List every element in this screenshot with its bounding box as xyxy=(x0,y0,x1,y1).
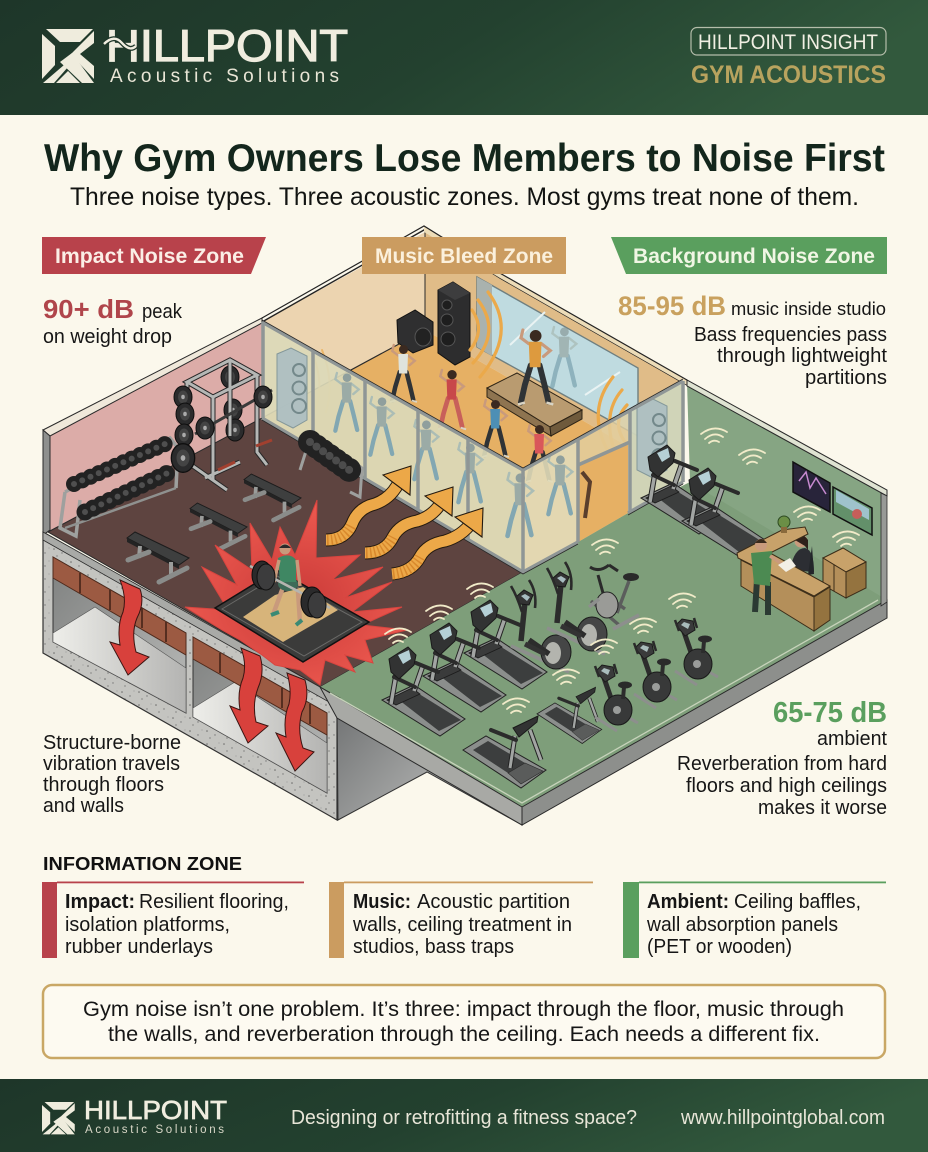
glass reflections xyxy=(277,348,667,536)
callout: structure-borne vibration: vibration travels xyxy=(43,753,180,775)
info card: ambient xyxy=(623,882,886,958)
callout: ambient stat: Reverberation from hard xyxy=(677,753,887,775)
header logo: HILLPOINT xyxy=(106,22,348,71)
vibration arrow 2 xyxy=(230,648,268,743)
callout: structure-borne vibration: through floors xyxy=(43,774,164,796)
info card: impact: rubber underlays xyxy=(65,936,213,958)
door figure xyxy=(582,472,590,518)
arrow 3 xyxy=(392,508,483,574)
gym floor: impact zone xyxy=(48,418,523,687)
arrow 2 xyxy=(365,487,453,553)
right wall end cap xyxy=(687,380,887,606)
weightlifter xyxy=(250,544,330,625)
isometric gym illustration xyxy=(43,226,887,825)
callout: impact stat xyxy=(43,294,183,348)
header logo: Acoustic Solutions xyxy=(110,66,339,87)
footer url: www.hillpointglobal.com xyxy=(680,1107,885,1129)
info card: ambient: Ceiling baffles, xyxy=(734,891,861,913)
footer logo: Acoustic Solutions xyxy=(85,1124,224,1136)
dumbbell rack left xyxy=(60,438,178,536)
arrow 1 xyxy=(326,466,411,540)
callout: music stat: music inside studio xyxy=(731,298,886,319)
header logo xyxy=(42,22,348,87)
desk xyxy=(737,527,830,596)
gym equipment: ellipticals xyxy=(511,562,607,672)
callout: structure-borne vibration: and walls xyxy=(43,795,124,817)
info card: music xyxy=(329,882,593,958)
zone label: impact xyxy=(42,237,266,274)
dumbbell rack right xyxy=(300,432,362,497)
info card: ambient: (PET or wooden) xyxy=(647,936,792,958)
callout: music stat xyxy=(618,291,887,389)
foundation block xyxy=(43,532,522,825)
summary callout xyxy=(43,985,885,1058)
title: Why Gym Owners Lose Members to Noise First xyxy=(44,137,885,180)
gym floor: background zone xyxy=(320,482,887,807)
studio sound waves xyxy=(313,292,627,458)
vibration arrow 1 xyxy=(110,580,149,675)
glass partition xyxy=(262,320,683,574)
reflected noise arcs xyxy=(385,428,859,713)
callout: structure-borne vibration xyxy=(43,732,181,817)
callout: structure-borne vibration: Structure-borne xyxy=(43,732,181,754)
frames xyxy=(262,322,683,572)
info card: impact: Resilient flooring, xyxy=(139,891,289,913)
zone label: music: Music Bleed Zone xyxy=(375,245,553,268)
footer logo xyxy=(42,1095,227,1136)
info card: impact xyxy=(42,882,304,958)
zone label: music xyxy=(362,237,566,274)
info card: music: Acoustic partition xyxy=(417,891,570,913)
cabinet xyxy=(823,548,866,598)
info card: ambient: Ambient: xyxy=(647,891,729,913)
callout: music stat: Bass frequencies pass xyxy=(694,324,887,346)
callout: music stat: 85-95 dB xyxy=(618,291,726,321)
gym equipment: bikes xyxy=(589,565,718,731)
reception area xyxy=(737,516,866,631)
info card: music: walls, ceiling treatment in xyxy=(352,914,572,936)
header tag: hillpoint insight: HILLPOINT INSIGHT xyxy=(698,31,878,54)
vibration arrow 3 xyxy=(276,673,314,771)
zone label: background xyxy=(611,237,887,274)
zone label: impact: Impact Noise Zone xyxy=(55,245,244,268)
callout: ambient stat: floors and high ceilings xyxy=(686,775,887,797)
callout: ambient stat: 65-75 dB xyxy=(773,697,887,729)
orange sound arrows xyxy=(326,466,483,574)
studio walls and floor xyxy=(262,226,687,572)
info card: music: Music: xyxy=(353,891,411,913)
customer xyxy=(755,580,768,615)
info card: impact: Impact: xyxy=(65,891,135,913)
receptionist xyxy=(790,548,814,572)
impact zone wall xyxy=(43,318,262,535)
callout: impact stat: peak xyxy=(142,301,183,323)
instructor xyxy=(518,330,553,404)
studio speaker stack xyxy=(397,282,470,365)
red vibration arrows xyxy=(110,580,314,771)
callout: impact stat: 90+ dB xyxy=(43,294,134,324)
floor slab edge xyxy=(43,532,887,825)
benches xyxy=(127,474,301,582)
basement cavity left xyxy=(53,557,186,713)
studio mirror xyxy=(477,277,638,436)
wall screens xyxy=(793,462,872,535)
subtitle: Three noise types. Three acoustic zones. Most gyms treat none of them. xyxy=(70,183,859,211)
footer logo: HILLPOINT xyxy=(84,1095,227,1125)
plant xyxy=(778,516,790,528)
summary callout: Gym noise isn’t one problem. It’s three: impact through the floor, music through xyxy=(83,998,844,1021)
impact burst xyxy=(185,500,407,685)
callout: ambient stat: makes it worse xyxy=(758,797,887,819)
summary callout: the walls, and reverberation through the ceiling. Each needs a different fix. xyxy=(108,1023,820,1046)
header band xyxy=(0,0,928,115)
lifting platform xyxy=(215,570,369,662)
callout: impact stat: on weight drop xyxy=(43,326,172,348)
callout: music stat: partitions xyxy=(805,367,887,389)
mirror reflection xyxy=(552,327,576,386)
instructor stage xyxy=(487,373,582,436)
power rack xyxy=(171,360,272,490)
information zone heading: INFORMATION ZONE xyxy=(43,853,242,874)
callout: ambient stat xyxy=(677,697,887,819)
footer prompt: Designing or retrofitting a fitness space? xyxy=(291,1107,637,1129)
info card: ambient: wall absorption panels xyxy=(646,914,838,936)
info card: impact: isolation platforms, xyxy=(65,914,230,936)
zone label: background: Background Noise Zone xyxy=(633,245,875,268)
callout: music stat: through lightweight xyxy=(717,345,887,367)
basement cavity right xyxy=(193,637,327,793)
info card: music: studios, bass traps xyxy=(353,936,514,958)
header tag: gym acoustics: GYM ACOUSTICS xyxy=(691,61,886,89)
background zone wall xyxy=(687,382,887,602)
gym equipment: treadmills xyxy=(382,445,765,788)
footer band xyxy=(0,1079,928,1152)
callout: ambient stat: ambient xyxy=(817,728,887,750)
dancers in studio xyxy=(390,345,553,482)
